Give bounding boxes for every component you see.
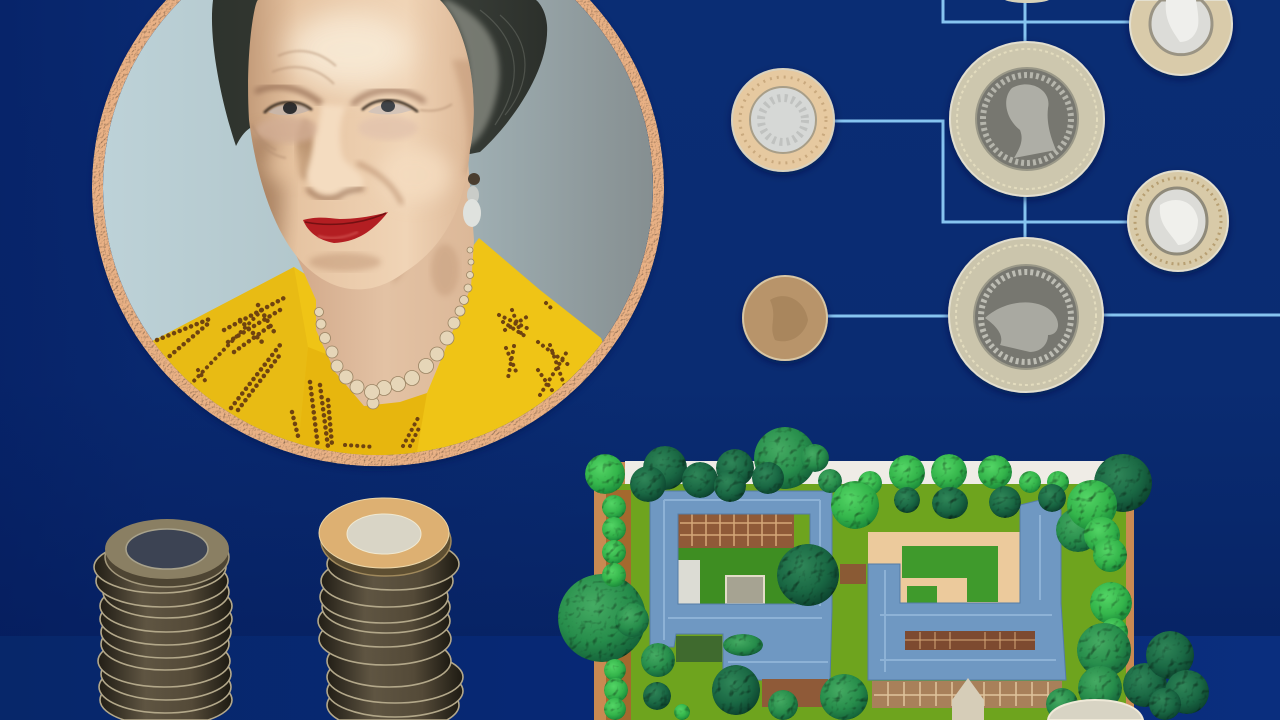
table band [0,636,1280,720]
face shading [242,12,482,271]
nose [307,104,364,199]
jacket [153,238,602,455]
model base [594,462,1134,720]
facade windows [680,514,792,546]
portrait medallion [92,0,664,469]
coin: upper left [732,69,834,171]
left eye [264,102,312,115]
courtyard lawn right [967,576,998,602]
coin: bottom right partial [1048,700,1143,720]
courtyard white block [674,560,700,604]
facial wrinkles [252,51,452,158]
brows and eye sockets [255,87,425,143]
sand courtyard [868,532,1022,604]
right roof ridges [880,515,1056,672]
left lower facade [762,679,828,707]
trees [558,427,1209,720]
earring [463,173,481,227]
entrance [952,678,984,720]
portrait backdrop [100,0,656,458]
coin: top right [1130,0,1232,75]
connector lines [826,0,1280,316]
left stack top coin [105,519,229,587]
coin: bronze [743,276,827,360]
face [248,0,474,289]
facade windows [874,682,1060,706]
courtyard outbuilding [726,576,764,604]
medallion ring [92,0,664,466]
jacket pattern [157,298,570,447]
coin: top stub [1005,0,1049,3]
portrait photo [100,0,656,458]
right roof [868,500,1066,680]
neck [296,160,474,406]
roof ridges [664,500,828,662]
grey hair streak [440,0,499,150]
coin: right middle [1128,171,1228,271]
gate [840,564,866,584]
inner top [297,347,427,458]
left wing facade [678,513,794,548]
hair strands [480,10,525,125]
coin: large upper [950,42,1104,196]
coin: large lower [949,238,1103,392]
left courtyard lawn [678,548,794,608]
left path strip [606,490,631,720]
right main facade [872,681,1062,708]
small lawn [907,586,937,603]
coin profile [985,302,1058,352]
right coin stack [318,538,463,720]
pearl necklace [314,247,474,409]
right stack top coin [319,498,451,576]
hair [212,0,547,160]
coin profile [1006,84,1056,158]
right inner facade [905,631,1035,650]
lawn [606,484,1126,720]
gap in left building [676,636,722,662]
smile crease [357,163,402,204]
left coin stack [94,541,232,720]
right eye [362,100,418,114]
left jacket tone [153,267,308,444]
courtyard lawn [902,546,998,578]
back strip [625,461,1115,485]
neck shadows [393,244,459,296]
lips [303,212,388,243]
medallion shadow [92,3,664,469]
inner facade windows [905,632,1035,649]
estate model [558,427,1209,720]
left roof [650,491,832,680]
